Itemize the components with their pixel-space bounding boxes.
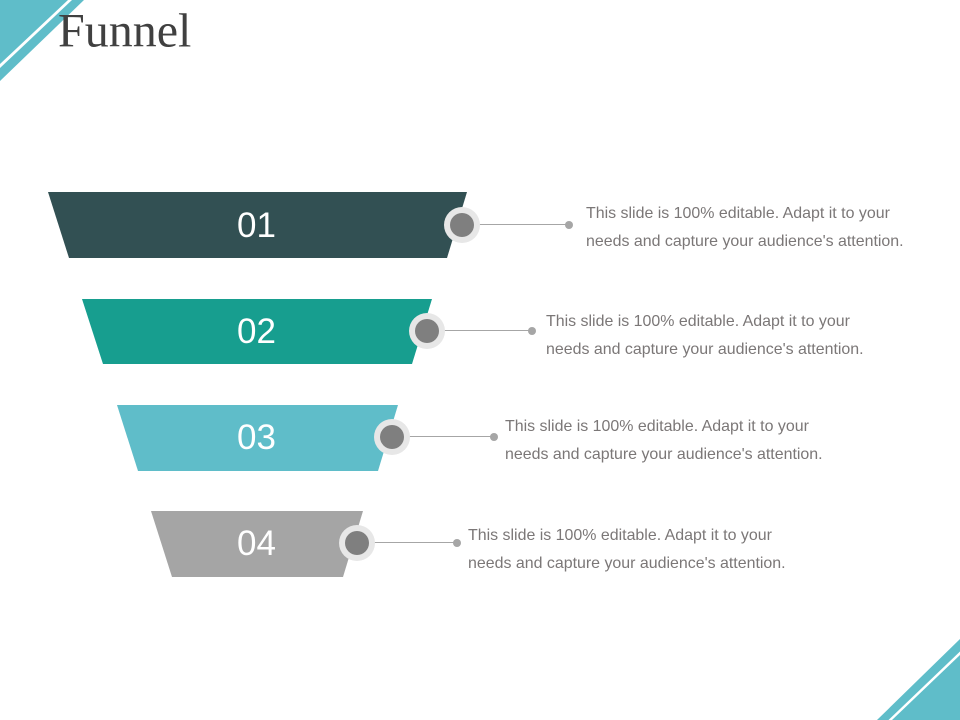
text 01: This slide is 100% editable. Adapt it to your <box>586 205 891 222</box>
text 03: needs and capture your audience's attention. <box>505 446 823 463</box>
text 02 <box>546 313 864 358</box>
band 02 <box>82 299 432 364</box>
corner decoration: bottom right <box>877 639 960 720</box>
funnel row 03 <box>117 405 823 471</box>
band 01 <box>48 192 467 258</box>
text 04 <box>468 527 786 572</box>
text 03: This slide is 100% editable. Adapt it to your <box>505 418 810 435</box>
number 01: 01 <box>237 206 276 245</box>
corner decoration: top left <box>0 0 84 81</box>
funnel row 01 <box>48 192 904 258</box>
text 01 <box>586 205 904 250</box>
text 04: needs and capture your audience's attention. <box>468 555 786 572</box>
text 03 <box>505 418 823 463</box>
band 03 <box>117 405 398 471</box>
band 04 <box>151 511 363 577</box>
connector 01 <box>444 207 573 243</box>
text 02: needs and capture your audience's attention. <box>546 341 864 358</box>
text 01: needs and capture your audience's attention. <box>586 233 904 250</box>
connector 03 <box>374 419 498 455</box>
number 02: 02 <box>237 312 276 351</box>
text 04: This slide is 100% editable. Adapt it to your <box>468 527 773 544</box>
connector 02 <box>409 313 536 349</box>
title: Funnel <box>58 4 191 58</box>
number 04: 04 <box>237 524 276 563</box>
funnel row 02 <box>82 299 864 364</box>
funnel row 04 <box>151 511 786 577</box>
text 02: This slide is 100% editable. Adapt it to your <box>546 313 851 330</box>
connector 04 <box>339 525 461 561</box>
number 03: 03 <box>237 418 276 457</box>
